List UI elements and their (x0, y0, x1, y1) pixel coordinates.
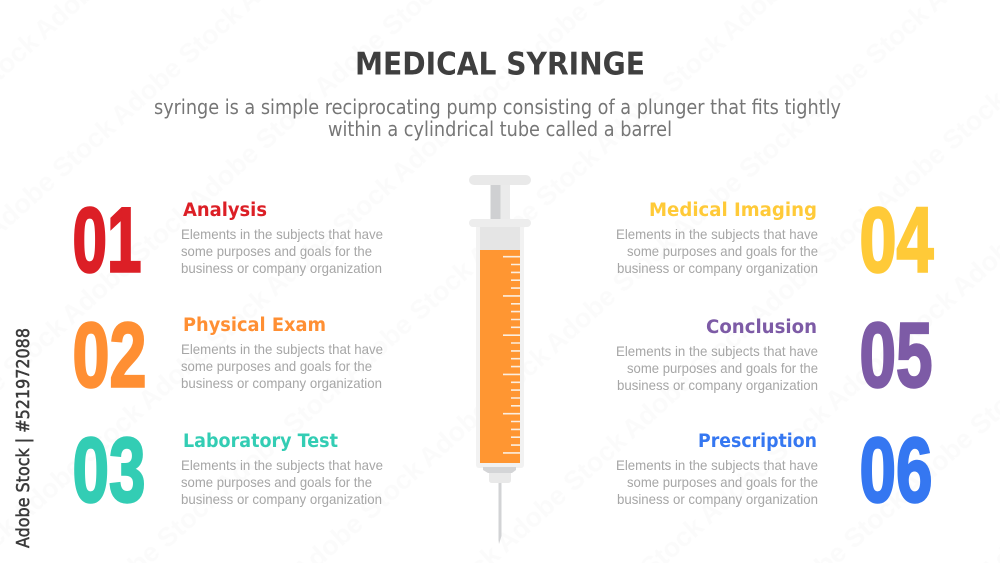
description 04: business or company organization (617, 260, 818, 276)
description 05: some purposes and goals for the (627, 360, 818, 376)
description 01: business or company organization (181, 260, 382, 276)
description 03: business or company organization (181, 491, 382, 507)
panel: 06 prescription (616, 420, 932, 522)
description 02: some purposes and goals for the (181, 358, 372, 374)
heading: medical imaging: Medical Imaging (649, 200, 817, 221)
description 01: Elements in the subjects that have (181, 226, 383, 242)
number 01: 01 (72, 190, 142, 292)
description 02: Elements in the subjects that have (181, 341, 383, 357)
description 05: Elements in the subjects that have (616, 343, 818, 359)
number 05: 05 (860, 304, 932, 406)
stock id label: Adobe Stock | #521972088 (13, 328, 34, 548)
icon: syringe (469, 175, 531, 544)
description 01: some purposes and goals for the (181, 243, 372, 259)
plunger rod (490, 185, 510, 220)
description 05 (616, 343, 818, 393)
subtitle (154, 95, 841, 141)
subtitle: within a cylindrical tube called a barrel (328, 117, 672, 141)
description 03: some purposes and goals for the (181, 474, 372, 490)
heading: laboratory test: Laboratory Test (183, 431, 338, 452)
needle hub (483, 467, 516, 483)
heading: analysis: Analysis (183, 200, 267, 221)
barrel (476, 222, 524, 468)
description 06: Elements in the subjects that have (616, 457, 818, 473)
number 02: 02 (72, 304, 146, 406)
number 04: 04 (860, 190, 934, 292)
description 04 (616, 226, 818, 276)
description 06: some purposes and goals for the (627, 474, 818, 490)
panel: 05 conclusion (616, 304, 932, 406)
title: MEDICAL SYRINGE (355, 46, 645, 82)
description 04: Elements in the subjects that have (616, 226, 818, 242)
needle (498, 483, 502, 544)
description 01 (181, 226, 383, 276)
plunger handle (469, 175, 531, 185)
liquid (480, 250, 520, 463)
barrel empty section (480, 227, 520, 251)
heading: conclusion: Conclusion (706, 317, 817, 338)
panel: 03 laboratory test (72, 420, 383, 522)
heading: prescription: Prescription (698, 431, 817, 452)
description 02: business or company organization (181, 375, 382, 391)
measure ticks (503, 257, 520, 453)
description 03 (181, 457, 383, 507)
panel: 01 analysis (72, 190, 383, 292)
description 03: Elements in the subjects that have (181, 457, 383, 473)
subtitle: syringe is a simple reciprocating pump consisting of a plunger that fits tightly (154, 95, 841, 119)
number 03: 03 (72, 420, 146, 522)
number 06: 06 (860, 420, 932, 522)
barrel flange (469, 219, 531, 227)
description 06: business or company organization (617, 491, 818, 507)
description 06 (616, 457, 818, 507)
panel: 02 physical exam (72, 304, 383, 406)
description 02 (181, 341, 383, 391)
description 04: some purposes and goals for the (627, 243, 818, 259)
description 05: business or company organization (617, 377, 818, 393)
heading: physical exam: Physical Exam (183, 315, 326, 336)
panel: 04 medical imaging (616, 190, 934, 292)
